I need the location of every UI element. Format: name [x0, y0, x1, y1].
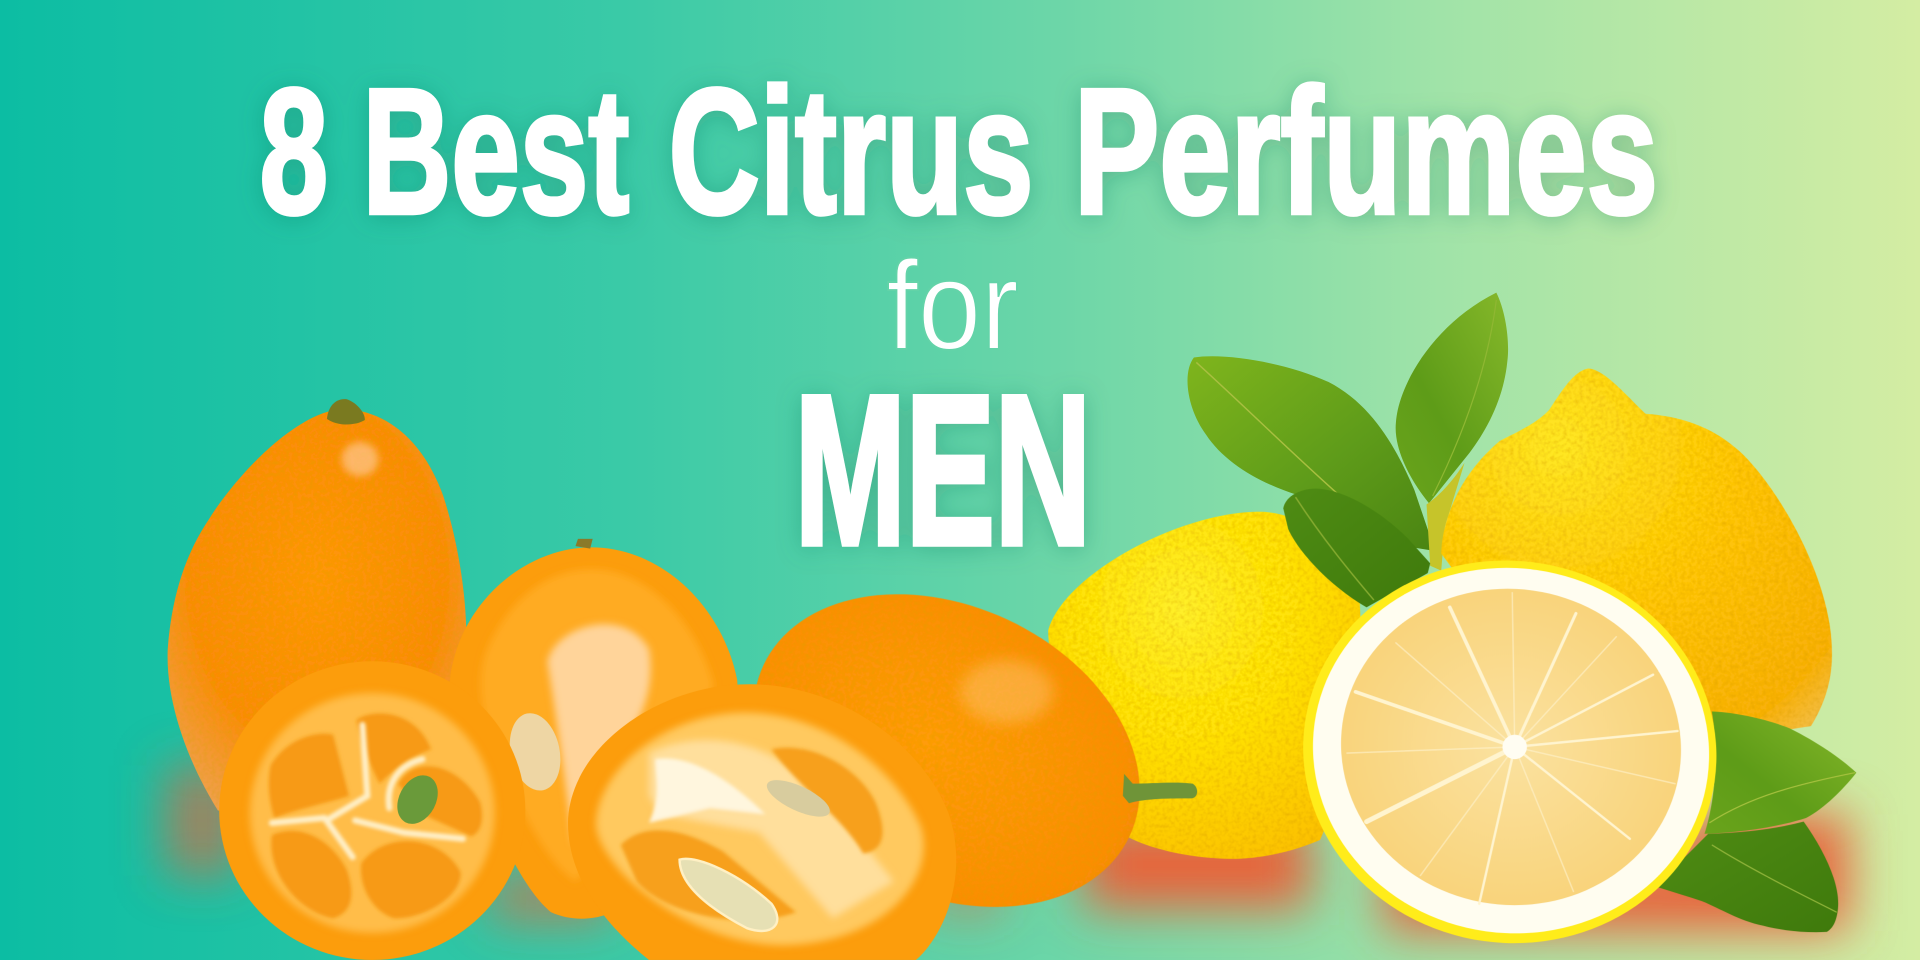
kumquat stem: [1123, 774, 1197, 803]
heading: 8 Best Citrus Perfumes: 8 Best: [260, 51, 629, 251]
kumquat: whole right: [702, 534, 1197, 960]
segment: [398, 766, 482, 836]
lemon slice: [1278, 534, 1741, 960]
segment: [361, 841, 461, 918]
green seed: [389, 768, 446, 831]
stem between leaves: [1427, 463, 1464, 571]
pith: [649, 740, 894, 918]
leaf: top left: [1188, 356, 1435, 551]
kumquat highlight: [342, 442, 378, 476]
segment: [356, 713, 431, 784]
kumquat half: center: [450, 539, 737, 919]
kumquat: whole tall left: [168, 399, 466, 811]
kumquat stem: [327, 399, 365, 424]
seed: [680, 859, 777, 931]
lemon: right whole: [1441, 369, 1832, 759]
segment: [269, 734, 349, 818]
orange glow patches at bottom: [165, 765, 1849, 931]
leaf: small center: [1283, 489, 1430, 607]
kumquat slice: oval center: [568, 684, 956, 960]
kumquat highlight: [960, 660, 1053, 724]
heading: MEN: MEN: [795, 352, 1091, 590]
kumquat slice: round left: [219, 661, 525, 960]
membranes: [272, 725, 463, 857]
leaf: right upper: [1704, 711, 1856, 834]
lemon slice core: [1502, 735, 1527, 759]
white pith highlight: [649, 758, 765, 823]
segment: [271, 831, 351, 918]
segment: [771, 748, 883, 853]
kumquat half pith: [547, 624, 651, 845]
kumquats group: [168, 399, 1197, 960]
leaf: right lower: [1656, 822, 1838, 932]
kumquat half stem: [576, 539, 593, 549]
heading: 8 Best Citrus Perfumes: Citrus: [669, 51, 1033, 251]
segment: [621, 830, 796, 920]
leaf: top right: [1396, 293, 1508, 503]
title: [260, 51, 1658, 590]
lemons group: [1048, 293, 1856, 960]
lemon: left whole: [1048, 512, 1365, 859]
kumquat half seed: [503, 708, 567, 795]
seed small: [762, 773, 835, 824]
lemon slice membranes: [1347, 593, 1678, 904]
heading: 8 Best Citrus Perfumes: Perfumes: [1074, 51, 1658, 251]
heading: 8 Best Citrus Perfumes: [260, 51, 1658, 251]
heading: for: for: [887, 235, 1019, 376]
